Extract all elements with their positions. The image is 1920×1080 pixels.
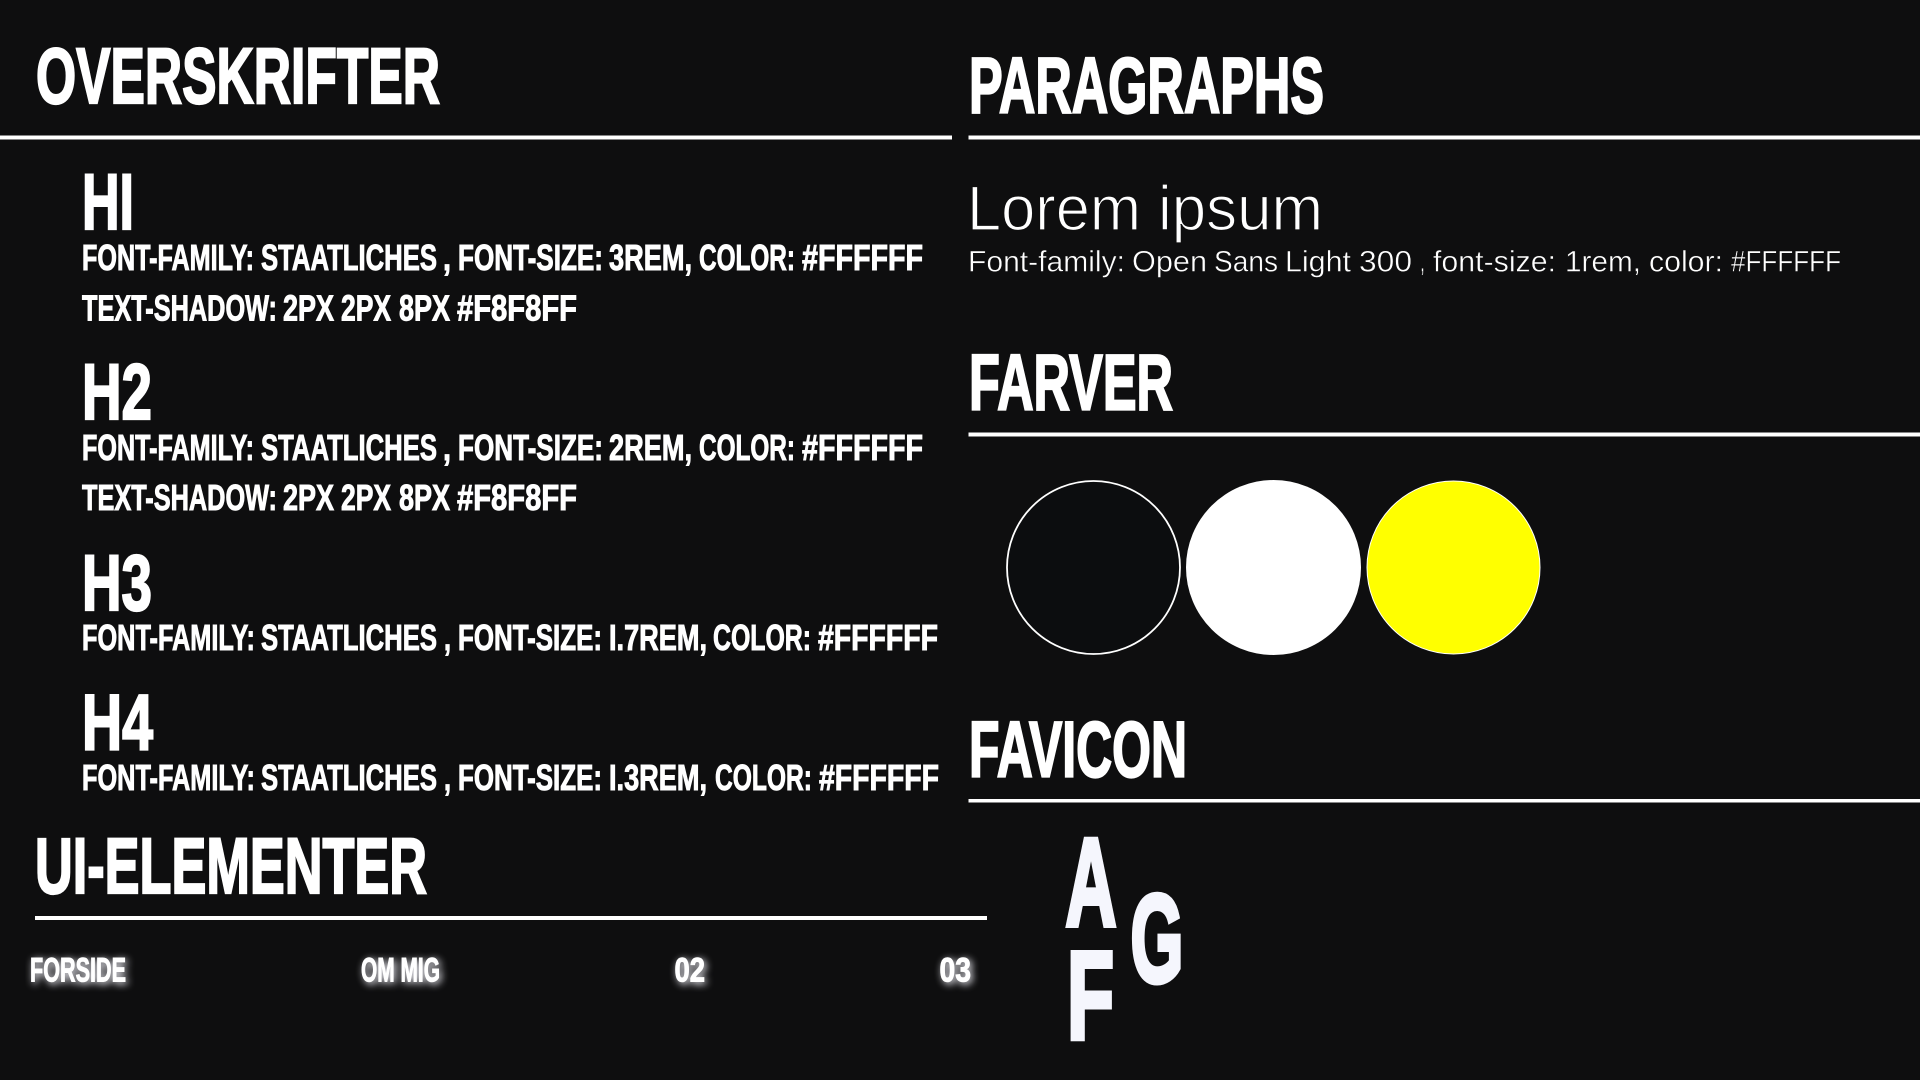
panel: overskrifter bbox=[0, 31, 952, 798]
H2 font description: STAATLICHES bbox=[261, 427, 437, 468]
paragraph sample: lorem ipsum: Lorem bbox=[967, 174, 1141, 244]
nav item: 03: 03 bbox=[940, 952, 971, 990]
H1 shadow description bbox=[82, 288, 577, 328]
paragraph font description: Sans bbox=[1214, 246, 1278, 278]
icon: AFG favicon letters: A bbox=[1066, 814, 1116, 952]
paragraph sample: lorem ipsum bbox=[967, 174, 1323, 244]
colour swatch: white bbox=[1186, 480, 1361, 655]
H2 sample: H2 bbox=[82, 347, 152, 436]
H2 shadow description: 2PX bbox=[283, 477, 334, 518]
H2 font description: #FFFFFF bbox=[802, 427, 923, 468]
H2 font description: FONT-FAMILY: bbox=[82, 427, 254, 468]
paragraph font description: Light bbox=[1285, 246, 1352, 278]
heading: overskrifter: OVERSKRIFTER bbox=[36, 31, 440, 120]
heading: paragraphs: PARAGRAPHS bbox=[969, 40, 1324, 130]
H4 font description: FONT-SIZE: bbox=[458, 757, 602, 798]
H1 shadow description: #F8F8FF bbox=[457, 288, 577, 328]
H2 font description: 2REM, bbox=[609, 427, 692, 468]
paragraph font description: Open bbox=[1132, 246, 1207, 278]
paragraph sample: lorem ipsum: ipsum bbox=[1158, 174, 1323, 244]
H1 font description: FONT-SIZE: bbox=[458, 237, 603, 278]
heading: favicon: FAVICON bbox=[969, 704, 1187, 794]
H1 font description: FONT-FAMILY: bbox=[82, 237, 254, 278]
H1 font description: COLOR: bbox=[699, 237, 795, 278]
H4 font description: #FFFFFF bbox=[819, 757, 939, 798]
panel: farver bbox=[968, 338, 1920, 655]
panel: paragraphs bbox=[967, 40, 1920, 278]
H2 font description: COLOR: bbox=[699, 427, 795, 468]
H3 font description: FONT-SIZE: bbox=[458, 617, 602, 658]
H3 font description: , bbox=[444, 617, 451, 658]
H3 font description: STAATLICHES bbox=[261, 617, 437, 658]
H1 shadow description: 2PX bbox=[283, 288, 334, 328]
panel: ui-elementer bbox=[30, 821, 987, 990]
H4 font description: COLOR: bbox=[715, 757, 812, 798]
H3 font description: #FFFFFF bbox=[818, 617, 938, 658]
H2 shadow description: TEXT-SHADOW: bbox=[82, 477, 277, 518]
H2 font description: FONT-SIZE: bbox=[458, 427, 603, 468]
H3 sample: H3 bbox=[82, 538, 152, 627]
paragraph font description: 300 bbox=[1359, 246, 1412, 278]
icon: AFG favicon letters: F bbox=[1067, 926, 1114, 1066]
H3 font description: I.7REM, bbox=[609, 617, 707, 658]
H4 sample: H4 bbox=[82, 678, 153, 766]
H1 font description: 3REM, bbox=[609, 237, 692, 278]
H1 font description: #FFFFFF bbox=[802, 237, 923, 278]
H4 font description: , bbox=[444, 757, 451, 798]
H4 font description: I.3REM, bbox=[609, 757, 707, 798]
icon: AFG favicon letters bbox=[1066, 814, 1184, 1066]
H2 shadow description: #F8F8FF bbox=[457, 477, 577, 518]
H3 font description bbox=[82, 617, 938, 658]
H2 shadow description: 2PX bbox=[341, 477, 391, 518]
heading: ui-elementer: UI-ELEMENTER bbox=[35, 821, 427, 910]
paragraph font description: font-size: bbox=[1433, 246, 1556, 278]
H1 shadow description: 2PX bbox=[341, 288, 391, 328]
nav item: forside: FORSIDE bbox=[30, 952, 126, 990]
H3 font description: COLOR: bbox=[713, 617, 811, 658]
colour swatch: yellow bbox=[1367, 481, 1540, 654]
H1 font description: STAATLICHES bbox=[261, 237, 437, 278]
nav item: 02: 02 bbox=[674, 952, 705, 990]
H1 shadow description: 8PX bbox=[399, 288, 450, 328]
H2 shadow description bbox=[82, 477, 577, 518]
H3 font description: FONT-FAMILY: bbox=[82, 617, 255, 658]
panel: favicon bbox=[968, 704, 1920, 1066]
H1 font description bbox=[82, 237, 923, 278]
H4 font description bbox=[82, 757, 939, 798]
nav item: om mig: OM MIG bbox=[361, 952, 440, 990]
H4 font description: FONT-FAMILY: bbox=[82, 757, 255, 798]
paragraph font description: #FFFFFF bbox=[1731, 246, 1841, 278]
paragraph font description: 1rem, bbox=[1565, 246, 1641, 278]
paragraph font description bbox=[968, 246, 1841, 278]
heading: farver: FARVER bbox=[969, 338, 1173, 426]
paragraph font description: color: bbox=[1649, 246, 1723, 278]
H1 shadow description: TEXT-SHADOW: bbox=[82, 288, 277, 328]
colour swatch: black bbox=[1007, 481, 1180, 654]
icon: AFG favicon letters: G bbox=[1130, 870, 1184, 1009]
paragraph font description: Font-family: bbox=[968, 246, 1125, 278]
H2 font description: , bbox=[443, 427, 451, 468]
H1 font description: , bbox=[443, 237, 451, 278]
H2 font description bbox=[82, 427, 923, 468]
H1 sample: HI bbox=[82, 157, 134, 246]
H4 font description: STAATLICHES bbox=[261, 757, 437, 798]
H2 shadow description: 8PX bbox=[399, 477, 450, 518]
paragraph font description: , bbox=[1420, 246, 1425, 278]
